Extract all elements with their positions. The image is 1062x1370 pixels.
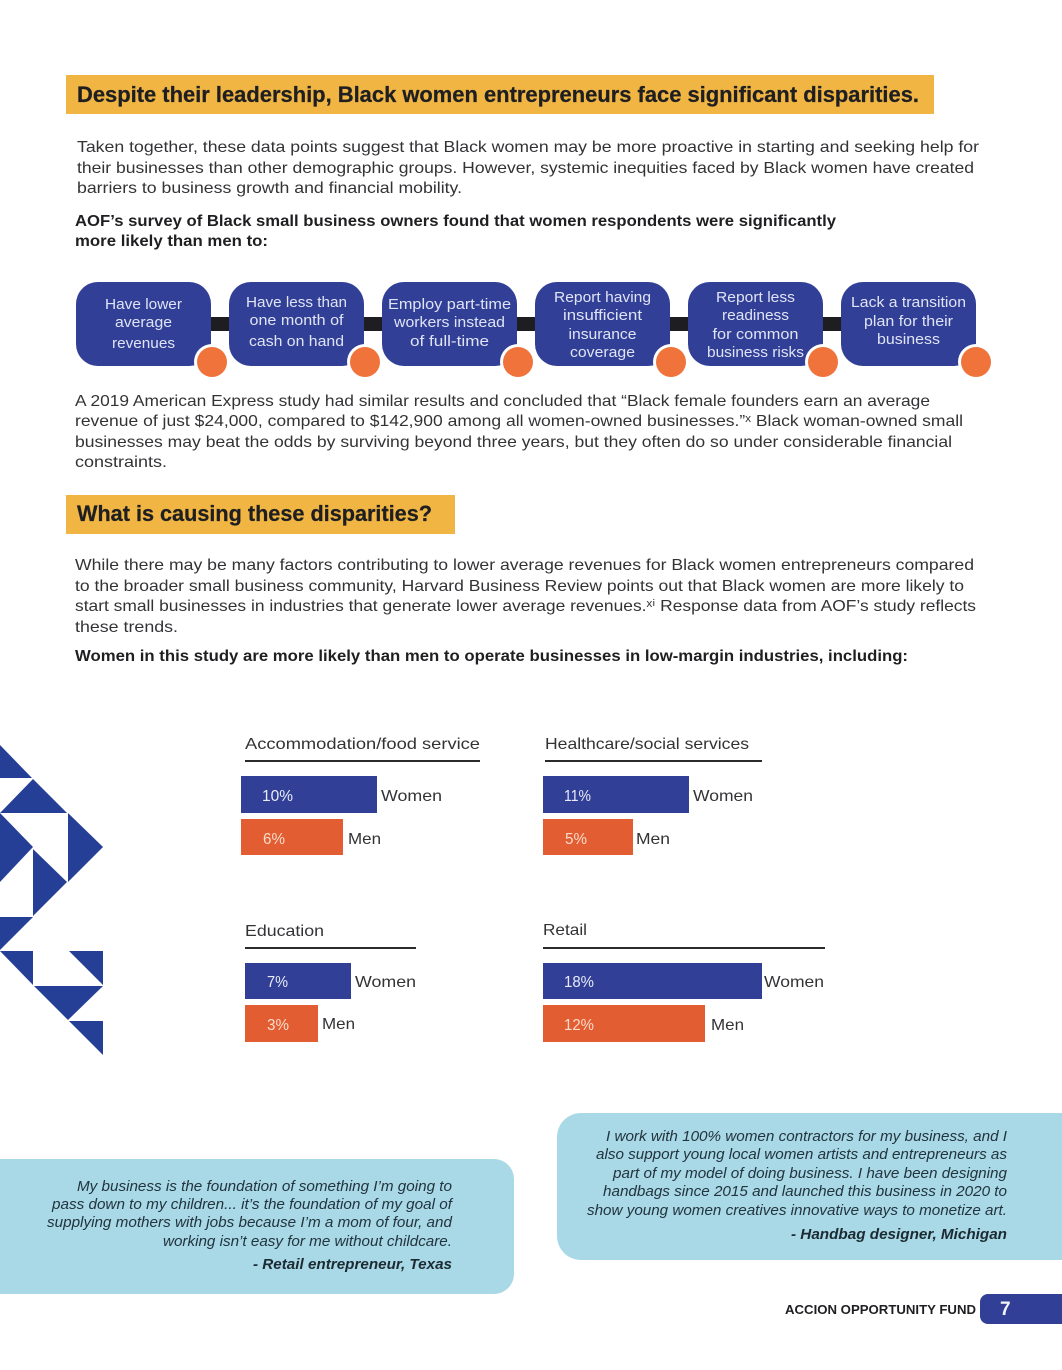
callout: handbag designer quote: show young women creatives innovative ways to monetize art. xyxy=(587,1203,1007,1219)
callout: handbag designer quote: I work with 100% women contractors for my business, and I xyxy=(606,1129,1007,1145)
callout: handbag designer quote: also support young local women artists and entrepreneurs as xyxy=(596,1147,1008,1163)
bar chart: healthcare/social services: 5% xyxy=(565,831,587,848)
callout: handbag designer quote xyxy=(557,1113,1062,1260)
step: cash on hand: one month of xyxy=(250,312,344,329)
footer: organisation name: ACCION OPPORTUNITY FUND xyxy=(785,1302,976,1317)
text block: causes paragraph: to the broader small business community, Harvard Business Review points out that Black women are more likely to xyxy=(75,578,964,595)
text block: survey finding: AOF’s survey of Black small business owners found that women respondents were significantly xyxy=(75,213,836,230)
text block: American Express study: businesses may beat the odds by surviving beyond three years, but they often do so under considerable financial xyxy=(75,434,952,451)
text block: causes paragraph: start small businesses in industries that generate lower average revenues.ˣⁱ Response data from AOF’s study reflects xyxy=(75,598,976,615)
step: insurance coverage: Report having xyxy=(554,289,651,306)
text block: low-margin industries: Women in this study are more likely than men to operate businesses in low-margin industries, including: xyxy=(75,648,908,665)
step: lower revenues xyxy=(76,282,230,380)
step: part-time workers: workers instead xyxy=(393,314,505,331)
step: readiness for risks: readiness xyxy=(722,307,789,324)
step: insurance coverage: coverage xyxy=(570,344,635,361)
callout: retail entrepreneur quote: - Retail entrepreneur, Texas xyxy=(253,1257,452,1273)
step: transition plan: Lack a transition xyxy=(851,294,966,311)
bar chart: retail: 18% xyxy=(564,974,594,991)
step: insurance coverage xyxy=(535,282,689,380)
bar chart: healthcare/social services: Healthcare/social services xyxy=(545,736,749,753)
text block: American Express study: constraints. xyxy=(75,454,167,471)
step: readiness for risks: for common xyxy=(712,326,798,343)
callout: retail entrepreneur quote: My business is the foundation of something I’m going to xyxy=(77,1179,452,1195)
heading: disparities: Despite their leadership, Black women entrepreneurs face significant disparities. xyxy=(77,82,919,107)
step: readiness for risks: business risks xyxy=(707,344,804,361)
bar chart: healthcare/social services: Women xyxy=(693,788,753,805)
callout: retail entrepreneur quote: pass down to my children... it’s the foundation of my goal of xyxy=(51,1197,454,1213)
bar chart: education: Education xyxy=(245,923,324,940)
bar chart: healthcare/social services: 11% xyxy=(564,788,591,805)
heading: causes: What is causing these disparities? xyxy=(77,501,432,526)
bar chart: accommodation/food service: Accommodation/food service xyxy=(245,736,480,753)
step: transition plan: business xyxy=(877,331,940,348)
step: transition plan: plan for their xyxy=(864,313,953,330)
text block: causes paragraph xyxy=(75,557,976,636)
text block: survey finding: more likely than men to: xyxy=(75,233,268,250)
step: readiness for risks xyxy=(688,282,841,380)
bar chart: healthcare/social services xyxy=(543,736,762,855)
bar chart: education: 3% xyxy=(267,1017,289,1034)
bar chart: accommodation/food service: Men xyxy=(348,831,381,848)
callout: retail entrepreneur quote: working isn’t easy for me without childcare. xyxy=(163,1234,452,1250)
text block: survey finding xyxy=(75,213,836,250)
callout: handbag designer quote: part of my model of doing business. I have been designing xyxy=(612,1166,1008,1182)
callout: retail entrepreneur quote xyxy=(0,1159,514,1294)
text block: American Express study xyxy=(75,393,963,471)
bar chart: education: Women xyxy=(355,974,416,991)
callout: handbag designer quote: handbags since 2015 and launched this business in 2020 to xyxy=(603,1184,1007,1200)
step: insurance coverage: insurance xyxy=(568,326,636,343)
bar chart: retail: Retail xyxy=(543,922,587,939)
text block: intro paragraph xyxy=(77,139,980,197)
text block: American Express study: A 2019 American Express study had similar results and concluded that “Black female founders earn an average xyxy=(75,393,930,410)
callout: handbag designer quote: - Handbag designer, Michigan xyxy=(791,1227,1007,1243)
heading: disparities xyxy=(66,75,934,114)
step: lower revenues: average xyxy=(115,314,172,331)
step: cash on hand xyxy=(229,282,383,380)
step: readiness for risks: Report less xyxy=(716,289,795,306)
text block: intro paragraph: their businesses than other demographic groups. However, systemic inequities faced by Black women have created xyxy=(77,160,974,177)
text block: intro paragraph: Taken together, these data points suggest that Black women may be more proactive in starting and seeking help for xyxy=(77,139,980,156)
bar chart: accommodation/food service: 10% xyxy=(262,788,293,805)
step: part-time workers xyxy=(382,282,536,380)
process chain: six disparities xyxy=(76,282,994,380)
text block: causes paragraph: these trends. xyxy=(75,619,178,636)
bar chart: accommodation/food service xyxy=(241,736,480,855)
text block: intro paragraph: barriers to business growth and financial mobility. xyxy=(77,180,462,197)
step: cash on hand: Have less than xyxy=(246,294,347,311)
bar chart: education: Men xyxy=(322,1016,355,1033)
footer: page number tab: 7 xyxy=(1000,1299,1011,1320)
bar chart: education: 7% xyxy=(267,974,288,991)
bar chart: retail: Men xyxy=(711,1017,744,1034)
step: part-time workers: of full-time xyxy=(410,333,489,350)
bar chart: healthcare/social services: Men xyxy=(636,831,670,848)
bar chart: retail xyxy=(543,922,825,1042)
bar chart: retail: Women xyxy=(764,974,824,991)
bar chart: education xyxy=(245,923,416,1042)
bar chart: accommodation/food service: Women xyxy=(381,788,442,805)
step: part-time workers: Employ part-time xyxy=(388,296,511,313)
decorative triangle pattern xyxy=(0,745,103,1055)
footer: page number tab xyxy=(980,1294,1062,1324)
callout: retail entrepreneur quote: supplying mothers with jobs because I’m a mom of four, and xyxy=(47,1215,453,1231)
connectors xyxy=(205,317,905,331)
step: lower revenues: revenues xyxy=(112,335,175,352)
bar chart: accommodation/food service: 6% xyxy=(263,831,285,848)
step: transition plan xyxy=(841,282,994,380)
step: insurance coverage: insufficient xyxy=(563,307,643,324)
text block: causes paragraph: While there may be many factors contributing to lower average revenues for Black women entrepreneurs compared xyxy=(75,557,974,574)
text block: American Express study: revenue of just $24,000, compared to $142,900 among all women-owned businesses.”ˣ Black woman-owned small xyxy=(75,413,963,430)
step: cash on hand: cash on hand xyxy=(249,333,344,350)
heading: causes xyxy=(66,495,455,534)
step: lower revenues: Have lower xyxy=(105,296,182,313)
bar chart: retail: 12% xyxy=(564,1017,594,1034)
